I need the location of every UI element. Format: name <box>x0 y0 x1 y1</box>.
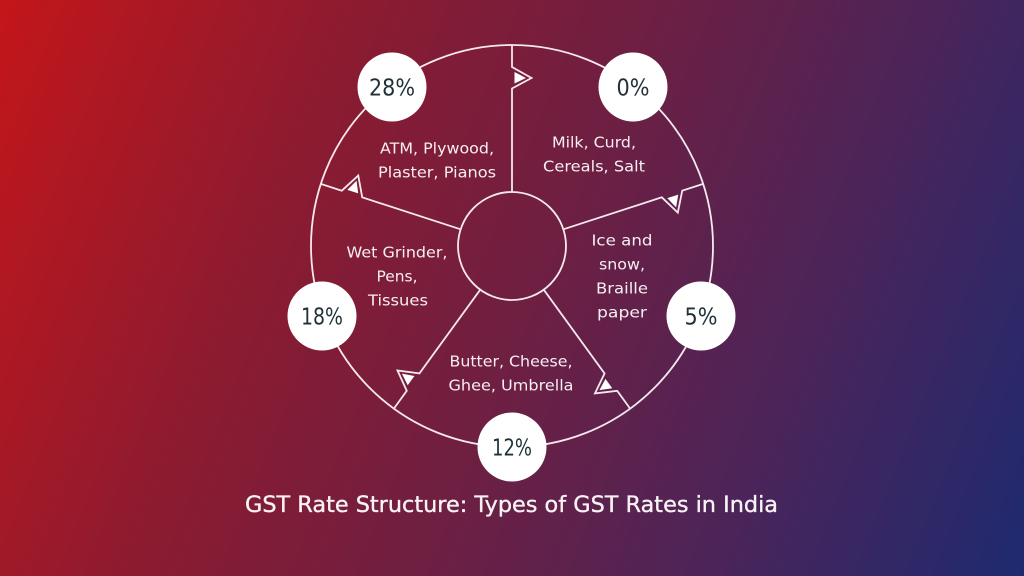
label: 28% items: Plaster, Pianos <box>378 164 496 182</box>
label: 28% items <box>378 140 496 182</box>
badge: 28% <box>358 52 426 122</box>
label: 12% items: Butter, Cheese, <box>450 352 572 370</box>
badge: 12%: 12% <box>492 436 532 462</box>
badge: 5% <box>666 282 736 350</box>
label: 18% items <box>346 244 448 310</box>
title: GST Rate Structure: Types of GST Rates in India <box>245 493 778 518</box>
spokes with triangle markers <box>321 45 709 420</box>
label: 5% items: paper <box>597 304 648 322</box>
outer ring <box>311 45 713 447</box>
badge: 12% <box>478 412 546 482</box>
label: 0% items: Milk, Curd, <box>552 134 636 152</box>
badge: 28%: 28% <box>369 76 415 102</box>
badge: 0% <box>598 52 668 122</box>
label: 28% items: ATM, Plywood, <box>380 140 494 158</box>
label: 12% items: Ghee, Umbrella <box>448 376 574 394</box>
label: 18% items: Wet Grinder, <box>346 244 448 262</box>
label: 5% items: Braille <box>596 280 648 298</box>
label: 12% items <box>448 352 574 394</box>
label: 0% items: Cereals, Salt <box>543 158 645 176</box>
label: 0% items <box>543 134 645 176</box>
label: 5% items: snow, <box>599 256 645 274</box>
label: 5% items: Ice and <box>592 232 652 250</box>
label: 5% items <box>592 232 652 322</box>
badge: 5%: 5% <box>684 304 718 330</box>
label: 18% items: Tissues <box>367 292 428 310</box>
inner hub circle <box>458 192 566 300</box>
badge: 18% <box>288 282 356 350</box>
badge: 0%: 0% <box>616 76 650 102</box>
badge: 18%: 18% <box>301 304 343 330</box>
label: 18% items: Pens, <box>376 268 418 286</box>
